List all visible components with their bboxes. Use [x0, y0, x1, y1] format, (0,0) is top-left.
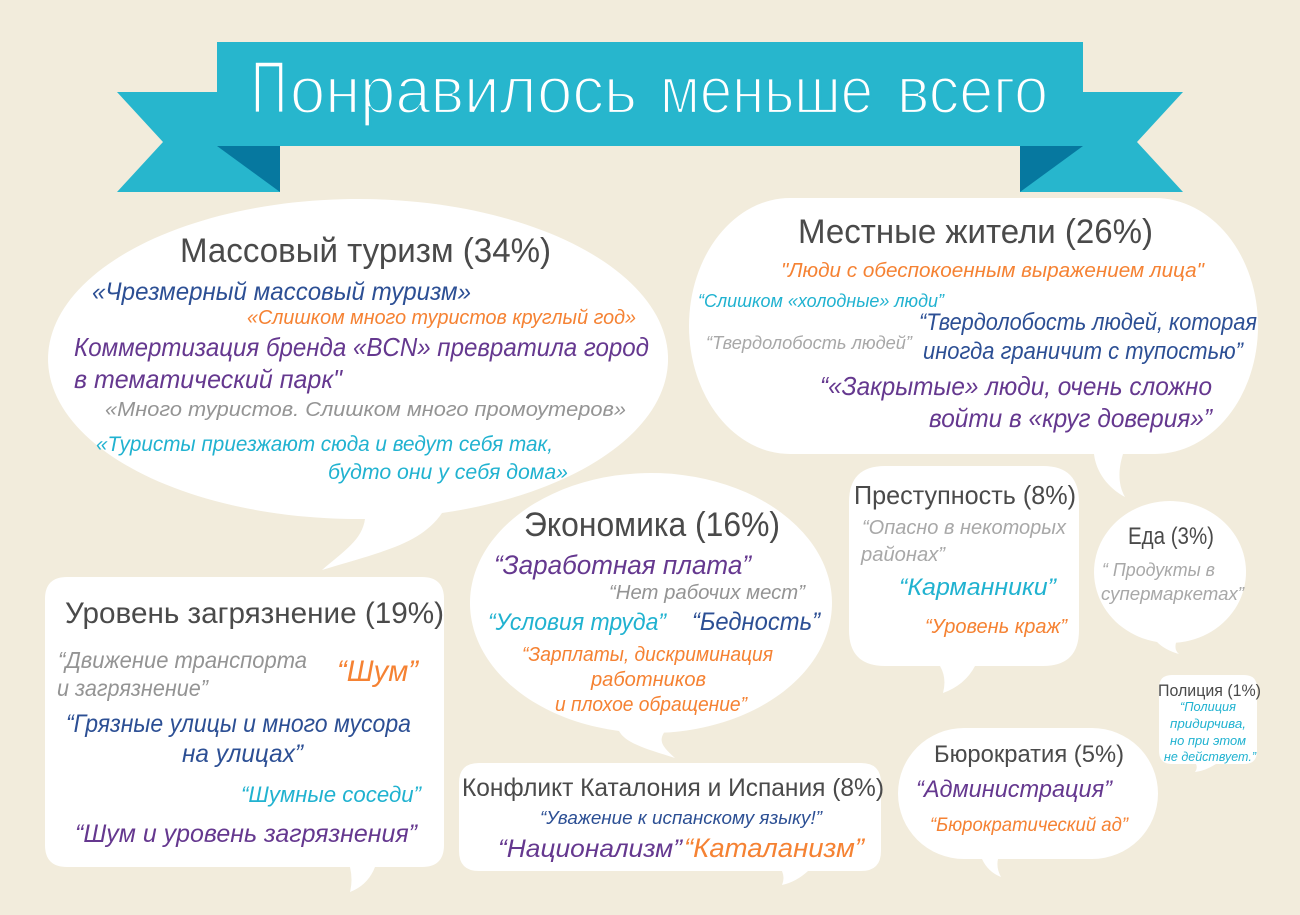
quote [66, 710, 411, 768]
quote: и загрязнение” [57, 675, 209, 701]
heading: pollution: Уровень загрязнение (19%) [65, 597, 444, 630]
quote: «Много туристов. Слишком много промоутеров» [105, 399, 626, 421]
quote: “Условия труда” [488, 609, 667, 636]
speech bubble: food [1094, 501, 1246, 654]
quote [522, 644, 773, 716]
quote: “Движение транспорта [58, 647, 307, 673]
quote: придирчива, [1170, 716, 1246, 731]
panel: pollution [45, 577, 444, 892]
quote: не действует.” [1164, 749, 1257, 764]
quote: “Шум” [337, 655, 420, 688]
quote: “Уровень краж” [925, 616, 1068, 638]
quote [96, 433, 568, 484]
quote [1164, 699, 1257, 764]
heading: bureaucracy: Бюрократия (5%) [934, 741, 1124, 768]
heading: mass tourism: Массовый туризм (34%) [180, 232, 551, 270]
panel: economy [470, 473, 832, 758]
speech bubble: police [1159, 675, 1257, 772]
heading: police: Полиция (1%) [1158, 681, 1261, 700]
panel: food [1094, 501, 1246, 654]
speech bubble: pollution [45, 577, 444, 892]
quote: «Слишком много туристов круглый год» [247, 307, 636, 329]
quote: “«Закрытые» люди, очень сложно [820, 371, 1212, 401]
quote: “Полиция [1180, 699, 1236, 714]
panel: locals [689, 198, 1258, 497]
quote: “Бедность” [692, 608, 822, 636]
quote: на улицах” [182, 740, 305, 768]
quote: “Бюрократический ад” [930, 815, 1130, 836]
quote: “Опасно в некоторых [862, 517, 1067, 539]
quote: Коммертизация бренда «BCN» превратила город [74, 332, 649, 362]
speech bubble: conflict [459, 763, 881, 885]
quote [919, 309, 1257, 365]
quote [860, 517, 1067, 566]
heading: locals: Местные жители (26%) [798, 213, 1153, 251]
quote: в тематический парк" [74, 364, 344, 394]
quote: “Шумные соседи” [241, 782, 423, 807]
quote: “Шум и уровень загрязнения” [75, 820, 419, 848]
quote [74, 332, 649, 394]
quote: и плохое обращение” [555, 694, 748, 716]
quote: иногда граничит с тупостью” [923, 338, 1244, 365]
quote [820, 371, 1213, 433]
quote [1101, 560, 1245, 604]
quote: «Туристы приезжают сюда и ведут себя так, [96, 433, 553, 456]
quote [57, 647, 307, 701]
heading: crime: Преступность (8%) [854, 480, 1076, 510]
heading: economy: Экономика (16%) [524, 506, 780, 544]
quote: “Слишком «холодные» люди” [698, 291, 945, 311]
quote: “Заработная плата” [494, 550, 752, 580]
title: меньше [660, 53, 873, 127]
speech bubble: economy [470, 473, 832, 758]
title: онравилось [290, 53, 637, 127]
quote: но при этом [1170, 733, 1246, 748]
title: всего [897, 53, 1048, 127]
quote: супермаркетах” [1101, 584, 1245, 604]
quote: “ Продукты в [1102, 560, 1215, 580]
heading: food: Еда (3%) [1128, 523, 1214, 550]
speech bubble: crime [849, 466, 1079, 693]
panel: Catalonia-Spain conflict [459, 763, 884, 885]
speech bubble: mass tourism [48, 199, 668, 570]
quote: будто они у себя дома» [328, 461, 568, 484]
quote: районах” [860, 544, 946, 566]
quote: "Люди с обеспокоенным выражением лица" [781, 260, 1205, 282]
title: П [251, 46, 287, 129]
quote: работников [590, 669, 706, 691]
quote: “Твердолобость людей” [706, 333, 913, 353]
speech bubble: bureaucracy [898, 728, 1158, 877]
quote: “Национализм” [498, 835, 684, 863]
panel: bureaucracy [898, 728, 1158, 877]
panel: police [1158, 675, 1261, 772]
quote: «Чрезмерный массовый туризм» [92, 278, 471, 306]
panel: mass tourism [48, 199, 668, 570]
quote: “Грязные улицы и много мусора [66, 710, 411, 738]
quote: войти в «круг доверия»” [929, 403, 1213, 433]
quote: “Каталанизм” [684, 833, 865, 863]
title ribbon [117, 42, 1183, 192]
quote: “Карманники” [899, 574, 1057, 601]
quote: “Твердолобость людей, которая [919, 309, 1257, 336]
quote: “Администрация” [916, 776, 1113, 803]
quote: “Уважение к испанскому языку!” [540, 808, 823, 828]
heading: conflict: Конфликт Каталония и Испания (8%) [462, 774, 884, 802]
quote: “Нет рабочих мест” [609, 582, 806, 604]
quote: “Зарплаты, дискриминация [522, 644, 773, 666]
speech bubble: locals [689, 198, 1258, 497]
panel: crime [849, 466, 1079, 693]
